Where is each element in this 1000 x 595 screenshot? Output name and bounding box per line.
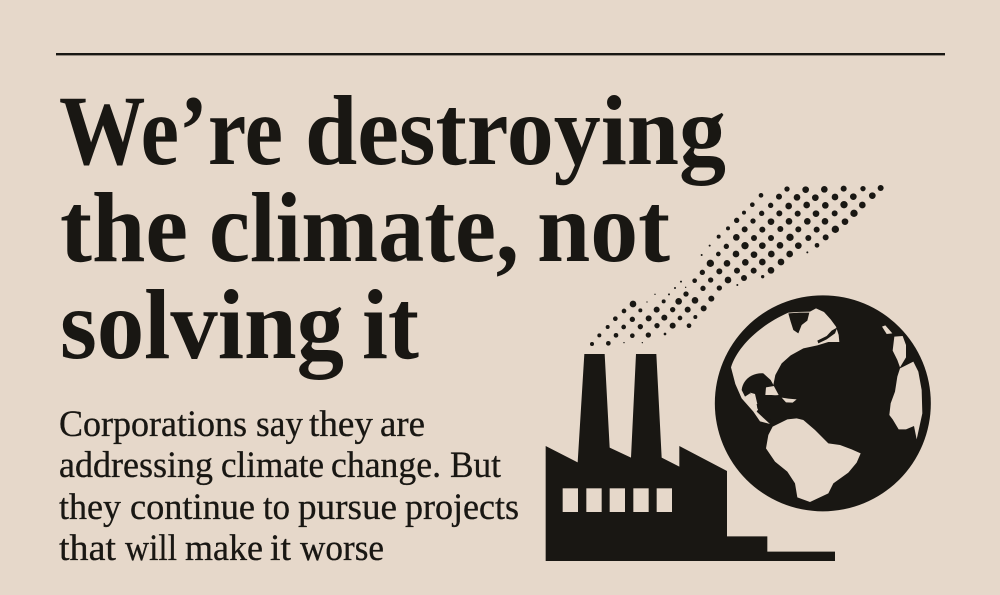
- subtitle text block: they: [309, 403, 374, 444]
- subtitle text block: worse: [300, 527, 384, 568]
- subtitle text block: addressing: [59, 444, 213, 485]
- Mexico notch: [750, 393, 757, 404]
- Arctic islands channel: [817, 327, 837, 343]
- subtitle text block: change.: [331, 444, 441, 485]
- subtitle text block: that: [59, 527, 116, 568]
- subtitle text block: Corporations: [59, 403, 247, 444]
- subtitle text block: pursue: [298, 486, 397, 527]
- Hudson Bay: [788, 313, 809, 333]
- subtitle text block: are: [380, 403, 425, 444]
- title: the: [60, 172, 188, 283]
- Iceland: [882, 325, 892, 334]
- subtitle text block: [59, 403, 519, 568]
- icon: halftone smoke plume: [590, 185, 884, 346]
- Cuba: [782, 398, 797, 403]
- title: it: [362, 269, 419, 380]
- North America landmass: [731, 308, 839, 424]
- title: [59, 75, 726, 380]
- subtitle text block: climate: [221, 444, 324, 485]
- subtitle text block: projects: [405, 486, 519, 527]
- Europe: [893, 336, 906, 367]
- title: solving: [60, 269, 344, 380]
- Africa: [889, 362, 922, 439]
- title: climate,: [209, 172, 519, 283]
- title: We’re: [59, 75, 283, 186]
- title: destroying: [305, 75, 726, 186]
- subtitle text block: continue: [130, 486, 255, 527]
- subtitle text block: to: [263, 486, 290, 527]
- icon: globe: [715, 295, 931, 511]
- subtitle text block: will: [125, 527, 177, 568]
- Gulf of Mexico and Caribbean: [742, 373, 800, 424]
- factory windows: [563, 488, 672, 512]
- icon: factory: [546, 354, 835, 561]
- subtitle text block: it: [270, 527, 291, 568]
- subtitle text block: say: [256, 403, 304, 444]
- subtitle text block: they: [59, 486, 122, 527]
- South America: [766, 418, 861, 502]
- subtitle text block: make: [185, 527, 263, 568]
- subtitle text block: But: [450, 444, 501, 485]
- title: not: [537, 172, 670, 283]
